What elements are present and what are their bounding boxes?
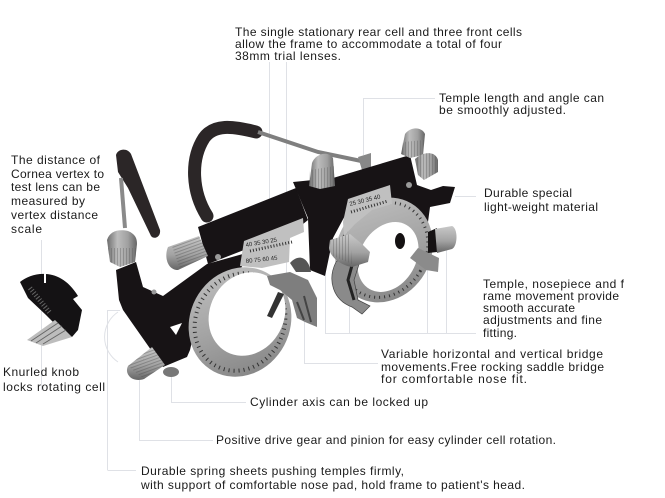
text: vertex distance: vertex distance bbox=[11, 208, 98, 222]
knob: right side bbox=[415, 153, 438, 180]
left vernier scale plate: 40 35 30 25 bbox=[245, 237, 278, 249]
left vernier scale plate: 80 75 60 45 bbox=[246, 256, 278, 265]
text: vertex distance: Cornea vertex to bbox=[11, 167, 104, 181]
text: top note: allow the frame to accommodate a total of four bbox=[235, 37, 502, 51]
text: temple nosepiece: rame movement provide bbox=[483, 289, 619, 303]
text: spring sheets: with support of comfortable nose pad, hold frame to patient's head. bbox=[140, 478, 525, 492]
text: drive gear: Positive drive gear and pinion for easy cylinder cell rotation. bbox=[216, 433, 556, 447]
text: temple nosepiece: Temple, nosepiece and f bbox=[483, 277, 625, 291]
rear cell black disc bbox=[395, 232, 407, 250]
text: temple length: Temple length and angle can bbox=[439, 91, 604, 105]
knob: left top bbox=[107, 230, 137, 267]
knob: center top bbox=[309, 154, 335, 189]
knobs bbox=[107, 128, 456, 380]
inset: knurled knob detail bbox=[20, 272, 82, 346]
text: top note bbox=[235, 25, 522, 63]
text: vertex distance bbox=[11, 153, 104, 236]
right lower cell bbox=[332, 250, 370, 314]
text: vertex distance: The distance of bbox=[11, 153, 101, 167]
leader lines bbox=[42, 62, 476, 470]
text: spring sheets bbox=[140, 464, 525, 492]
text: temple length bbox=[439, 91, 604, 117]
black frame: main bar bbox=[198, 188, 308, 264]
text: vertex distance: measured by bbox=[11, 194, 85, 208]
text: bridge bbox=[381, 347, 604, 386]
knob: front right bbox=[329, 234, 370, 267]
text: durable material: Durable special bbox=[484, 186, 572, 200]
left lens ring bbox=[170, 249, 310, 395]
text: spring sheets: Durable spring sheets pushing temples firmly, bbox=[141, 464, 404, 478]
text: knurled knob: locks rotating cell bbox=[3, 380, 105, 394]
white nose triangle bbox=[170, 323, 182, 335]
left temple rubber bbox=[116, 150, 160, 238]
text: durable material bbox=[484, 186, 598, 214]
screw bbox=[163, 367, 179, 377]
right temple rubber bbox=[195, 127, 256, 216]
text: cylinder axis: Cylinder axis can be locked up bbox=[250, 395, 428, 409]
right rear cell black bbox=[428, 228, 437, 253]
knob: right top bbox=[401, 128, 425, 158]
text: temple nosepiece bbox=[483, 277, 625, 340]
right temple rod bbox=[258, 132, 366, 162]
text: knurled knob: Knurled knob bbox=[3, 365, 79, 379]
left temple rod bbox=[121, 178, 125, 228]
knob: lower left bbox=[127, 347, 165, 380]
right vernier scale plate: 25 30 35 40 bbox=[349, 194, 382, 208]
right lens ring bbox=[316, 180, 452, 320]
black frame: left arm bbox=[116, 252, 250, 367]
text: bridge: movements.Free rocking saddle bridge bbox=[381, 360, 604, 374]
text: temple nosepiece: fitting. bbox=[483, 326, 517, 340]
eyeglass trial frame bbox=[107, 127, 456, 395]
text: temple nosepiece: adjustments and fine bbox=[483, 313, 602, 327]
small frame screws bbox=[152, 182, 412, 294]
left saddle nose piece bbox=[267, 258, 317, 327]
text: durable material: light-weight material bbox=[484, 200, 598, 214]
text: vertex distance: scale bbox=[11, 222, 42, 236]
right vernier scale plate bbox=[343, 185, 392, 236]
text: top note: The single stationary rear cell and three front cells bbox=[235, 25, 522, 39]
text: bridge: for comfortable nose fit. bbox=[381, 372, 527, 386]
knob: left horizontal bbox=[166, 236, 208, 270]
text: top note: 38mm trial lenses. bbox=[235, 49, 341, 63]
rear right gear bbox=[410, 248, 439, 272]
text: bridge: Variable horizontal and vertical bridge bbox=[381, 347, 603, 361]
black frame: center block and right bar bbox=[293, 155, 455, 276]
text: knurled knob bbox=[3, 365, 105, 394]
text: temple length: be smoothly adjusted. bbox=[439, 103, 566, 117]
text: vertex distance: test lens can be bbox=[11, 180, 100, 194]
knob: rear bbox=[435, 226, 456, 253]
text: temple nosepiece: smooth accurate bbox=[483, 301, 575, 315]
left vernier scale plate bbox=[240, 218, 304, 268]
